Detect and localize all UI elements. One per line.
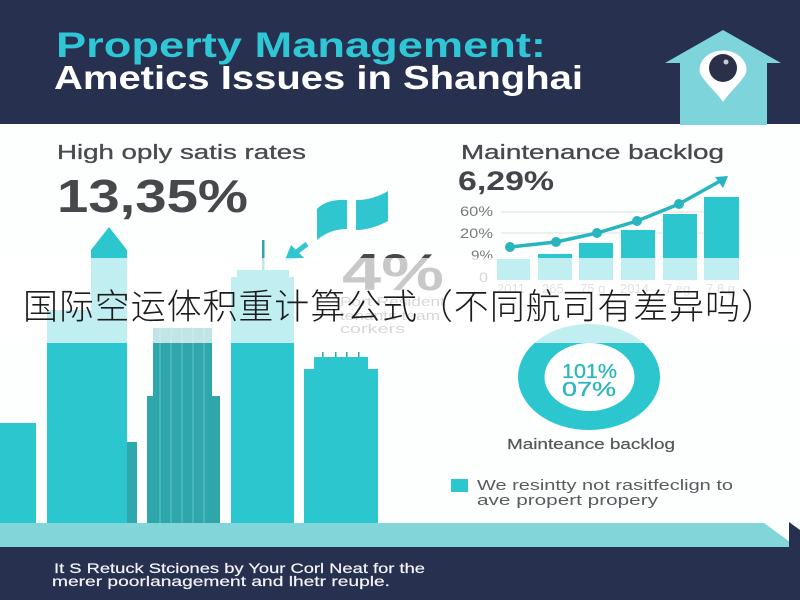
legend [451,478,733,509]
right stat heading: Maintenance backlog [461,142,724,164]
centre stat: 4% [340,244,446,336]
x axis labels: 7 8 g [706,281,735,296]
stat caption: Port Resident [340,294,446,309]
skyline buildings [0,227,378,523]
annex building [127,442,137,523]
y axis labels: 9% [471,248,493,263]
icon: house with location pin [665,30,781,125]
header panel [0,0,800,125]
donut values: 101% [562,361,617,383]
legend text: We resintty not rasitfeclign to [477,478,733,494]
stat value: 13,35% [57,170,248,222]
legend swatch [451,479,468,492]
stat value: 4% [342,244,444,302]
right stat value: 6,29% [458,166,554,196]
overlay headline: 国际空运体积重计算公式（不同航司有差异吗） [23,279,776,330]
centre stat: 4%: tenants team [340,308,440,323]
building with pointed roof [47,227,127,523]
x axis labels [497,281,735,296]
y axis labels: 60% [460,204,493,219]
ground band [0,523,790,547]
flag icon [317,191,388,240]
footer panel [0,522,800,600]
tall tower with antenna [231,240,294,523]
legend: ave propert propery [477,493,659,509]
striped central tower [147,328,220,523]
left stat: satisfaction rates [57,142,306,222]
y axis labels: 0 [479,270,488,285]
title line 2: Ametics Issues in Shanghai [54,59,583,96]
arrow pointing to tower [285,244,307,260]
y axis labels [460,204,493,285]
title line 1: Property Management: [56,26,546,65]
x axis labels: 265 [542,281,564,296]
x axis labels: 2011 [497,281,525,296]
trend line with arrow [505,176,728,252]
translucent overlay band [0,258,800,343]
x axis labels: 7 eg [665,281,690,296]
x axis labels: 2014 [620,281,649,296]
y axis labels: 20% [460,226,493,241]
bar and line chart [460,176,739,296]
donut chart [518,324,660,430]
footer panel: merer poorlanagement and lhetr reuple. [52,573,390,589]
bars [497,197,739,280]
donut chart: 07% [562,379,616,401]
building far left [0,423,36,523]
centre stat: 4%: corkers [340,321,406,336]
stat heading: High oply satis rates [57,142,306,164]
x axis labels: 75 g [580,281,605,296]
right building with rooftop [304,352,378,523]
footer text: It S Retuck Stciones by Your Corl Neat for the [54,560,425,576]
donut caption: Mainteance backlog [507,436,675,453]
